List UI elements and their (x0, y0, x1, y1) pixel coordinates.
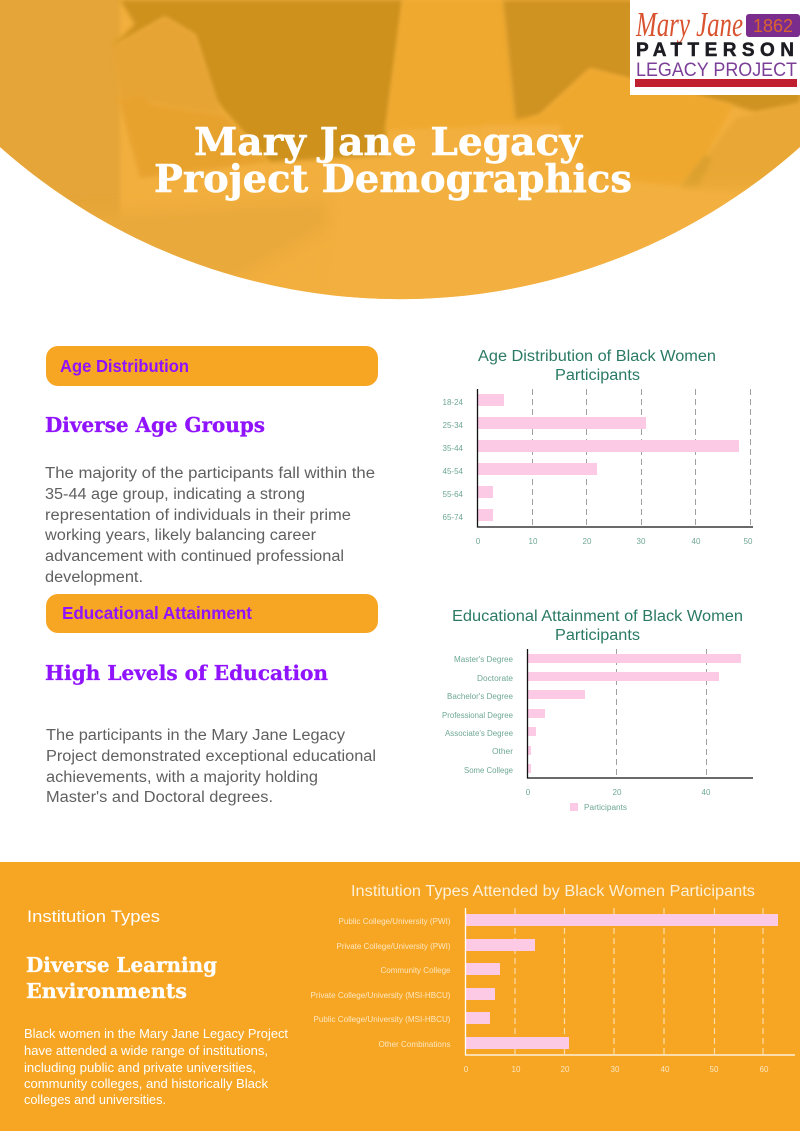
institution category labels: Private College/University (MSI-HBCU) (310, 991, 451, 1000)
education value axis: 40 (702, 788, 711, 797)
age category labels: 18-24 (443, 398, 464, 407)
age distribution description: advancement with continued professional (45, 548, 344, 565)
chart title: educational attainment: Participants (555, 627, 640, 644)
section label: institution types: Institution Types (27, 907, 160, 926)
educational attainment description: The participants in the Mary Jane Legacy (46, 727, 345, 744)
education category labels: Bachelor's Degree (447, 692, 514, 701)
age category labels: 25-34 (443, 421, 464, 430)
age value axis: 10 (529, 537, 538, 546)
institution value axis: 40 (661, 1065, 670, 1074)
chart legend: Participants (584, 803, 627, 812)
age distribution description: representation of individuals in their prime (45, 507, 351, 524)
age value axis: 40 (692, 537, 701, 546)
chart title: age distribution: Age Distribution of Black Women (478, 348, 716, 365)
title: Project Demographics (154, 156, 632, 201)
institution category labels: Other Combinations (378, 1040, 450, 1049)
age value axis (476, 537, 753, 546)
institution types description: including public and private universities, (24, 1061, 256, 1075)
age distribution description (44, 465, 375, 586)
age distribution description: working years, likely balancing career (44, 527, 316, 544)
logo: Mary Jane Patterson Legacy Project: PATTERSON (636, 40, 794, 61)
institution category labels (310, 917, 451, 1049)
panel: age distribution text (44, 346, 378, 586)
heading: diverse learning environments (26, 953, 217, 1003)
age distribution description: development. (45, 569, 143, 586)
institution value axis: 50 (710, 1065, 719, 1074)
heading: high levels of education: High Levels of Education (45, 661, 328, 685)
educational attainment description: achievements, with a majority holding (46, 769, 318, 786)
age value axis: 0 (476, 537, 481, 546)
institution category labels: Public College/University (PWI) (338, 917, 451, 926)
institution types description: have attended a wide range of institutions, (24, 1044, 268, 1058)
institution value axis: 10 (512, 1065, 521, 1074)
education value axis: 20 (613, 788, 622, 797)
age bars (478, 394, 739, 521)
section pill: age distribution: Age Distribution (60, 356, 189, 376)
chart title: educational attainment: Educational Attainment of Black Women (452, 608, 743, 625)
education value axis: 0 (526, 788, 531, 797)
education value axis (526, 788, 711, 797)
panel: institution types band (0, 862, 800, 1131)
institution value axis: 0 (464, 1065, 469, 1074)
chart: educational attainment (442, 608, 753, 812)
heading: diverse learning environments: Environments (26, 979, 187, 1003)
heading: diverse learning environments: Diverse Learning (26, 953, 217, 977)
institution category labels: Public College/University (MSI-HBCU) (314, 1015, 451, 1024)
institution value axis (464, 1065, 769, 1074)
chart title: age distribution: Participants (555, 367, 640, 384)
age category labels (443, 398, 464, 522)
institution category labels: Community College (380, 966, 451, 975)
title (154, 119, 632, 201)
education category labels: Professional Degree (442, 711, 514, 720)
heading: diverse age groups: Diverse Age Groups (45, 413, 265, 437)
chart title: age distribution (478, 348, 716, 384)
header banner with photo background (0, 0, 800, 310)
age distribution description: 35-44 age group, indicating a strong (45, 486, 305, 503)
educational attainment description: Master's and Doctoral degrees. (46, 789, 273, 806)
logo: Mary Jane Patterson Legacy Project: 1862 (753, 16, 793, 36)
section pill: age distribution (46, 346, 378, 386)
education category labels: Other (492, 747, 513, 756)
institution types description: Black women in the Mary Jane Legacy Project (24, 1027, 289, 1041)
education category labels: Doctorate (477, 674, 514, 683)
logo: Mary Jane Patterson Legacy Project: Mary Jane (635, 5, 743, 44)
age value axis: 20 (583, 537, 592, 546)
institution value axis: 30 (611, 1065, 620, 1074)
institution category labels: Private College/University (PWI) (336, 942, 451, 951)
chart title: institution types: Institution Types Attended by Black Women Participants (351, 883, 755, 900)
section pill: educational attainment: Educational Attainment (62, 603, 252, 623)
institution bars (466, 914, 778, 1049)
age category labels: 35-44 (443, 444, 464, 453)
education category labels: Some College (464, 766, 514, 775)
age category labels: 55-64 (443, 490, 464, 499)
chart: age distribution (443, 348, 753, 546)
age value axis: 50 (744, 537, 753, 546)
educational attainment description: Project demonstrated exceptional educational (46, 748, 376, 765)
age value axis: 30 (637, 537, 646, 546)
institution value axis: 20 (561, 1065, 570, 1074)
panel: educational attainment text (45, 594, 378, 806)
institution types description: community colleges, and historically Black (24, 1077, 269, 1091)
institution types description (24, 1027, 289, 1107)
age category labels: 45-54 (443, 467, 464, 476)
age distribution description: The majority of the participants fall within the (45, 465, 375, 482)
education category labels: Master's Degree (454, 655, 514, 664)
section pill: educational attainment (46, 594, 378, 633)
education category labels: Associate's Degree (445, 729, 514, 738)
institution types description: colleges and universities. (24, 1093, 166, 1107)
institution value axis: 60 (760, 1065, 769, 1074)
educational attainment description (46, 727, 376, 806)
chart title: educational attainment (452, 608, 743, 644)
education bars (528, 654, 741, 773)
title: Mary Jane Legacy (194, 119, 583, 164)
logo: Mary Jane Patterson Legacy Project (630, 0, 800, 95)
age category labels: 65-74 (443, 513, 464, 522)
chart: institution types (310, 883, 795, 1074)
education category labels (442, 655, 514, 775)
